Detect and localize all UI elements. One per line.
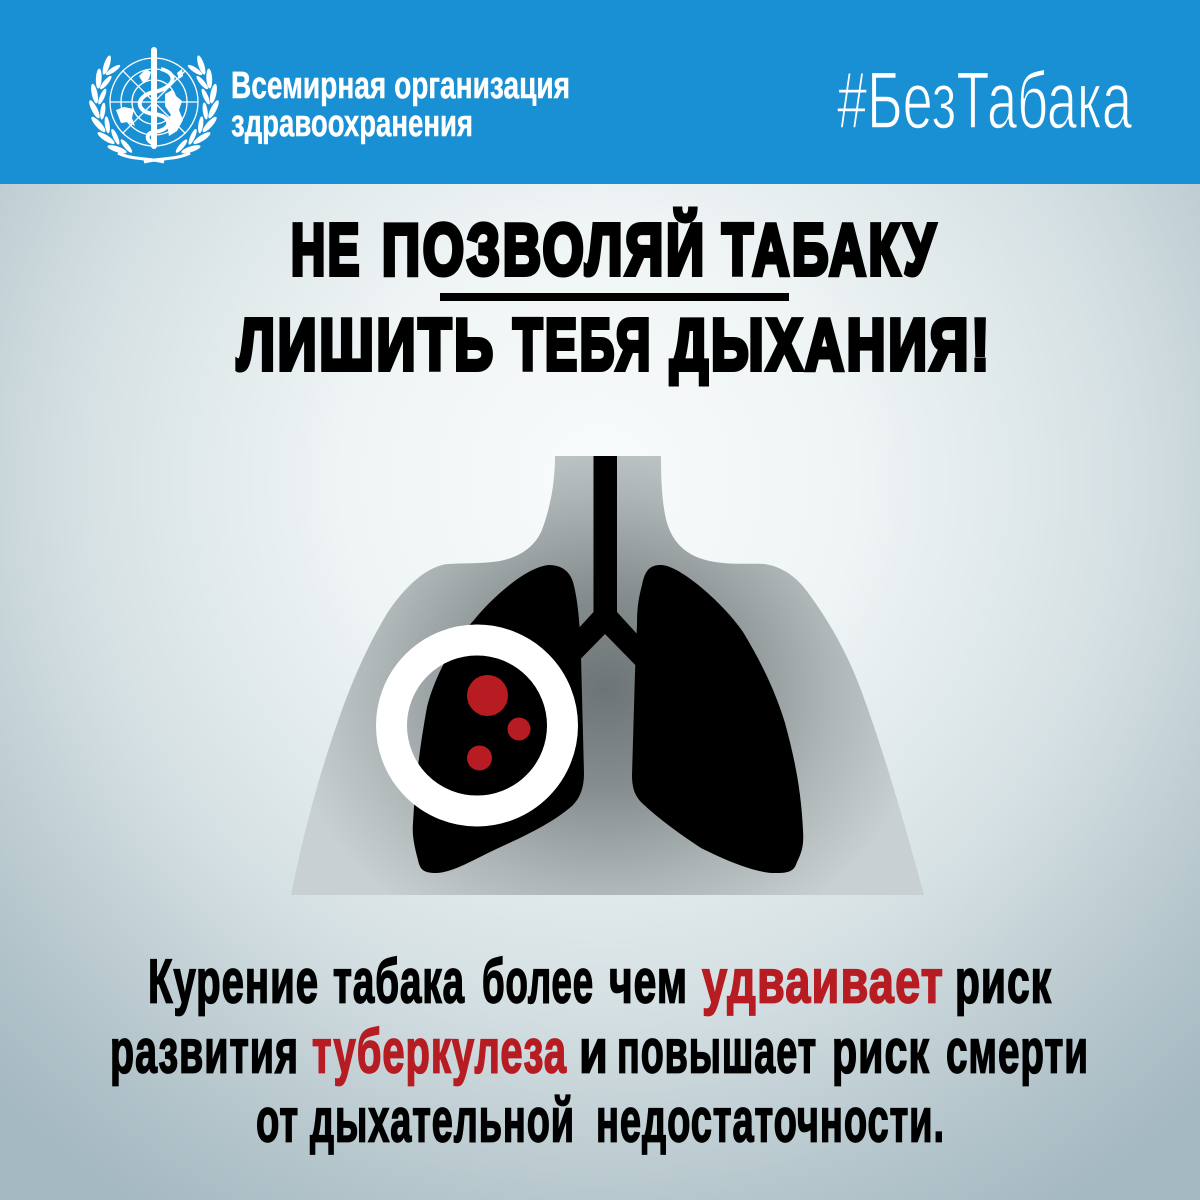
- title: ТАБАКУ: [722, 210, 938, 290]
- body text: смерти: [946, 1018, 1089, 1086]
- title: ТЕБЯ: [513, 306, 653, 386]
- right lung: [632, 565, 803, 873]
- lesion small right: [508, 718, 530, 740]
- organisation name: здравоохранения: [231, 103, 473, 145]
- title: ПОЗВОЛЯЙ: [382, 208, 707, 290]
- ribbon: [118, 153, 190, 162]
- body text: [110, 948, 1089, 1156]
- body text: Курение: [148, 948, 319, 1016]
- body text: от: [256, 1086, 299, 1156]
- title divider: [440, 293, 789, 301]
- title: НЕ: [291, 210, 362, 290]
- body text: удваивает: [702, 948, 944, 1016]
- icon: WHO emblem: [87, 47, 221, 162]
- body text: дыхательной: [310, 1086, 575, 1156]
- windpipe and bronchi: [545, 456, 667, 680]
- globe rings and meridians: [110, 58, 198, 146]
- body text: риск: [832, 1018, 930, 1086]
- organisation name: Всемирная организация: [231, 65, 570, 107]
- body text: и: [579, 1018, 609, 1086]
- body text: туберкулеза: [312, 1018, 567, 1086]
- body text: табака: [333, 948, 465, 1016]
- snake: [140, 69, 173, 143]
- lesion small lower: [467, 746, 492, 770]
- title: ЛИШИТЬ: [237, 306, 496, 386]
- body text: более: [482, 948, 594, 1016]
- left lung: [413, 565, 584, 873]
- body text: недостаточности.: [596, 1086, 945, 1156]
- body text: риск: [955, 948, 1052, 1016]
- staff: [151, 47, 157, 149]
- torso silhouette: [291, 456, 924, 895]
- organisation name: [231, 65, 570, 145]
- body text: развития: [110, 1018, 299, 1086]
- header band: [0, 0, 1200, 184]
- continents: [165, 90, 183, 136]
- body text: чем: [609, 948, 688, 1016]
- lungs illustration: [291, 456, 924, 895]
- laurel right: [174, 55, 221, 155]
- lesion large: [467, 675, 508, 716]
- body text: повышает: [617, 1018, 817, 1086]
- magnifier ring: [392, 640, 562, 811]
- title: [237, 208, 992, 386]
- laurel left: [87, 55, 134, 155]
- title: ДЫХАНИЯ!: [670, 306, 992, 386]
